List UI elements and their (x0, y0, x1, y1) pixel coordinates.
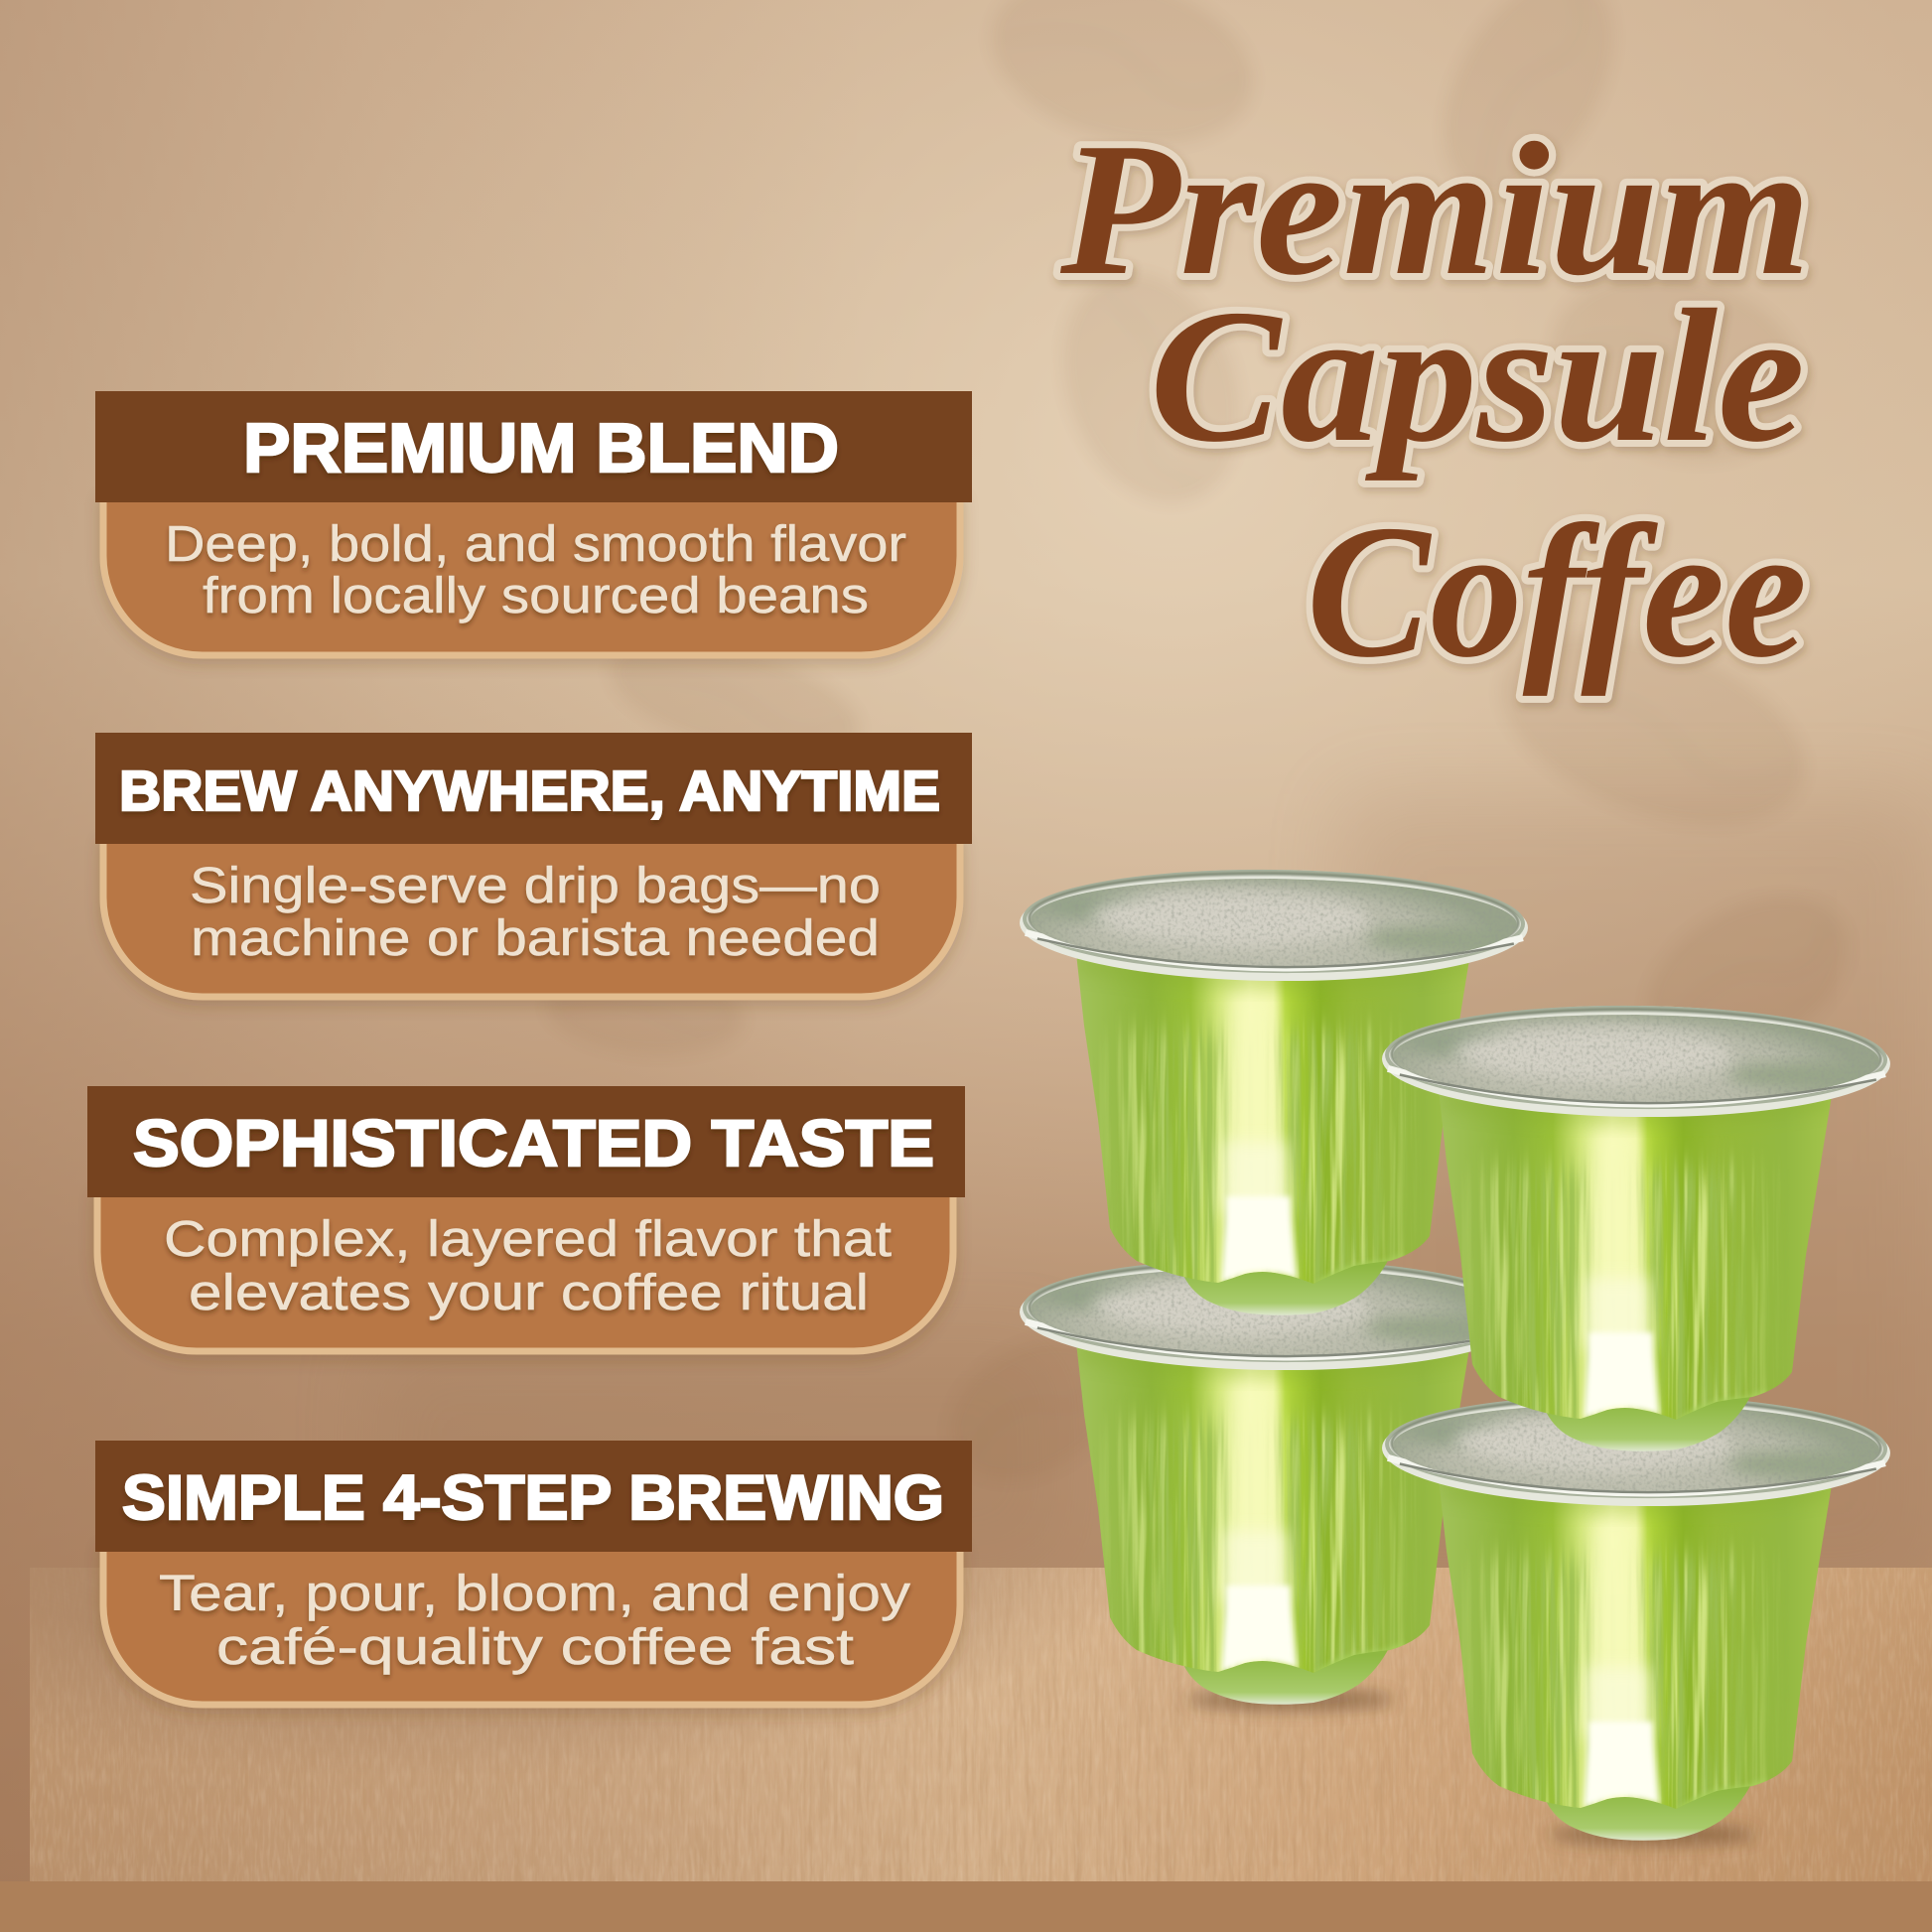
background coffee beans (543, 0, 1876, 1509)
description: café-quality coffee fast (216, 1618, 854, 1675)
card: brew anywhere (95, 733, 972, 997)
description: Deep, bold, and smooth flavor (165, 515, 906, 572)
heading banner (95, 391, 972, 502)
heading: SOPHISTICATED TASTE (133, 1106, 934, 1179)
description: elevates your coffee ritual (189, 1264, 869, 1320)
heading banner (95, 733, 972, 844)
description: Single-serve drip bags—no (190, 857, 881, 913)
card: simple brewing (95, 1441, 972, 1705)
title (1059, 103, 1811, 697)
title: Premium (1059, 103, 1811, 315)
description (159, 1565, 911, 1675)
card body (103, 1545, 960, 1705)
card body (103, 839, 960, 997)
capsule: bottom left (1019, 1256, 1529, 1705)
title: Capsule (1150, 270, 1805, 482)
heading banner (87, 1086, 965, 1197)
description (165, 515, 906, 623)
heading: PREMIUM BLEND (243, 409, 839, 486)
card: sophisticated taste (87, 1086, 965, 1351)
heading banner (95, 1441, 972, 1552)
heading: BREW ANYWHERE, ANYTIME (119, 759, 940, 823)
card: premium blend (95, 391, 972, 655)
description (190, 857, 881, 966)
wooden table (0, 1568, 1932, 1932)
description: from locally sourced beans (203, 567, 869, 623)
card body (103, 496, 960, 655)
description: Tear, pour, bloom, and enjoy (159, 1565, 911, 1621)
description: Complex, layered flavor that (164, 1210, 892, 1267)
card body (97, 1191, 953, 1351)
description (164, 1210, 892, 1320)
capsule: top right (1381, 1003, 1891, 1451)
capsule: top left (1019, 867, 1529, 1315)
capsule shadows on table (1186, 1689, 1757, 1845)
title: Coffee (1307, 485, 1807, 697)
capsule: bottom right (1381, 1392, 1891, 1841)
heading: SIMPLE 4-STEP BREWING (122, 1463, 944, 1533)
description: machine or barista needed (191, 909, 880, 966)
